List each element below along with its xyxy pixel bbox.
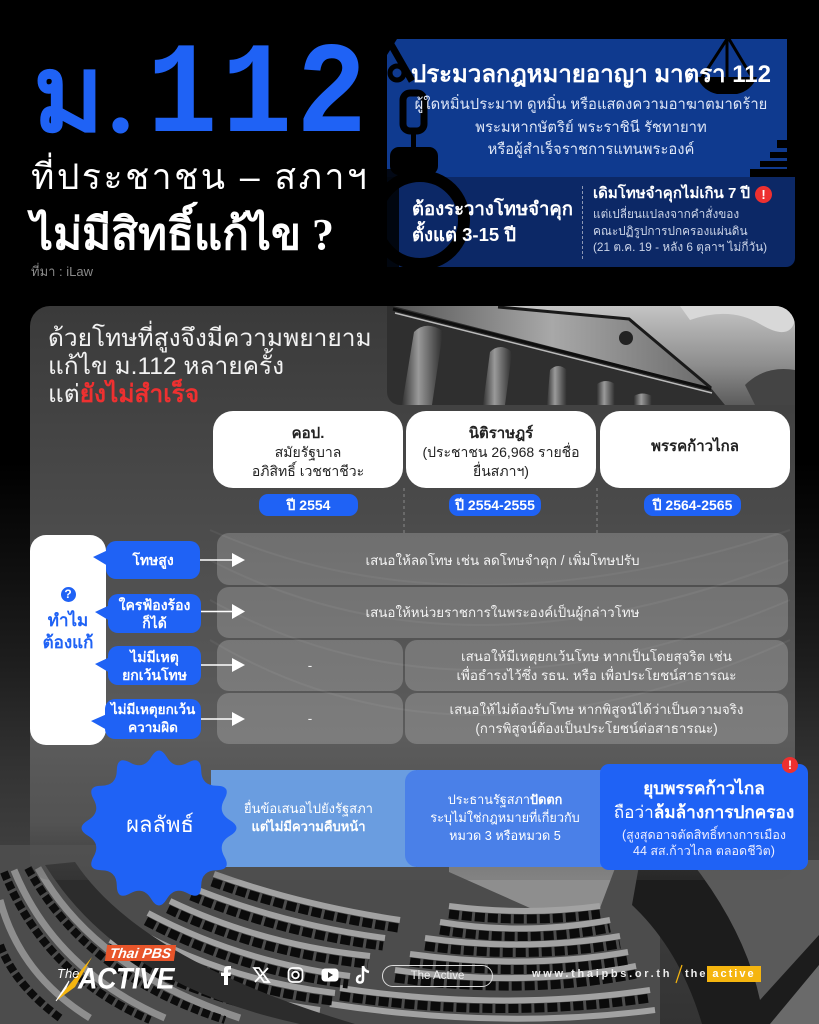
- Active: ACTIVE: [78, 962, 174, 995]
- main panel background: [30, 306, 795, 880]
- row 4 first column: -: [308, 711, 312, 726]
- row 4 first column: [217, 693, 403, 744]
- previous penalty detail: คณะปฏิรูปการปกครองแผ่นดิน: [593, 224, 748, 238]
- year pill 2: ปี 2554-2555: [455, 497, 535, 513]
- bubble tails and arrows: [91, 551, 245, 729]
- card: คอป.: คอป.: [292, 425, 324, 442]
- result headline: ถือว่าล้มล้างการปกครอง: [614, 802, 794, 822]
- url highlighted tag: [707, 966, 761, 982]
- bubble: ไม่มีเหตุยกเว้นความผิด: ความผิด: [128, 720, 178, 735]
- panel: law summary: [387, 39, 795, 267]
- bubble: ไม่มีเหตุยกเว้นโทษ: ยกเว้นโทษ: [122, 666, 187, 682]
- panel heading: แก้ไข ม.112 หลายครั้ง: [48, 353, 284, 380]
- title: ม.112: [33, 24, 371, 171]
- result headline: ยุบพรรคก้าวไกล: [643, 778, 765, 798]
- row 3 first column: [217, 640, 403, 691]
- year pill 2: [449, 494, 541, 516]
- year pill 1: [259, 494, 358, 516]
- icon: tiktok: [357, 966, 369, 983]
- row 3 second column: เพื่อธำรงไว้ซึ่ง รธน. หรือ เพื่อประโยชน์สาธารณะ: [456, 668, 736, 682]
- label box: why amend: [30, 535, 106, 745]
- label box: why amend: ต้องแก้: [43, 633, 93, 652]
- panel heading: แต่ยังไม่สำเร็จ: [48, 381, 199, 408]
- url highlighted tag: active: [712, 968, 756, 980]
- logo: The Active Thai PBS: [56, 945, 176, 1002]
- icon: facebook: [221, 966, 231, 985]
- background photo: parliament chamber: [0, 306, 819, 1024]
- icon: instagram: [288, 968, 302, 982]
- icon: question mark: ?: [64, 587, 72, 601]
- icon: red alert on result: [782, 757, 798, 773]
- label box: why amend: ทำไม: [48, 611, 88, 630]
- slash mark: [56, 957, 92, 1002]
- Thai PBS tag: Thai PBS: [109, 945, 172, 961]
- social handle pill: [382, 965, 493, 987]
- icon: red alert on result: !: [788, 758, 792, 772]
- bubble: ใครฟ้องร้องก็ได้: [108, 594, 201, 633]
- bubble: ไม่มีเหตุยกเว้นโทษ: ไม่มีเหตุ: [130, 648, 179, 664]
- result label: ผลลัพธ์: [126, 812, 194, 837]
- result band light: [211, 770, 416, 867]
- title: ม.112: ม: [33, 36, 104, 155]
- stage: [449, 855, 620, 908]
- card: คอป.: อภิสิทธิ์ เวชชาชีวะ: [252, 463, 364, 479]
- description: พระมหากษัตริย์ พระราชินี รัชทายาท: [475, 120, 707, 136]
- card: นิติราษฎร์: ยื่นสภาฯ): [473, 463, 529, 479]
- heading: ประมวลกฎหมายอาญา มาตรา 112: [411, 61, 771, 88]
- lower navy section: [387, 177, 795, 267]
- photo: parliament building: [387, 306, 795, 405]
- row 3 second column: เสนอให้มีเหตุยกเว้นโทษ หากเป็นโดยสุจริต เช่น: [461, 648, 732, 664]
- card: คอป.: สมัยรัฐบาล: [275, 444, 341, 460]
- row 3 second column: [405, 640, 788, 691]
- result: starburst: [82, 750, 236, 906]
- result band middle: ระบุไม่ใช่กฎหมายที่เกี่ยวกับ: [430, 811, 580, 825]
- icon: red alert: !: [761, 187, 766, 202]
- row 4 second column: เสนอให้ไม่ต้องรับโทษ หากพิสูจน์ได้ว่าเป็นความจริง: [450, 702, 743, 716]
- subtitle line 2: ไม่มีสิทธิ์แก้ไข ?: [31, 210, 334, 259]
- social handle pill: The Active: [411, 970, 464, 982]
- bubble: โทษสูง: [106, 541, 200, 579]
- result band middle: ประธานรัฐสภาปัดตก: [448, 793, 562, 807]
- icon: red alert: [755, 186, 772, 203]
- url slash: [676, 964, 682, 984]
- result band middle: [405, 770, 610, 867]
- result note: [622, 826, 786, 858]
- chamber wall: [632, 860, 819, 1024]
- description: หรือผู้สำเร็จราชการแทนพระองค์: [488, 142, 694, 158]
- panel heading: ด้วยโทษที่สูงจึงมีความพยายาม: [48, 325, 372, 352]
- result band light: แต่ไม่มีความคืบหน้า: [251, 819, 366, 834]
- previous penalty detail: [593, 206, 767, 254]
- title: ม.112: .: [108, 43, 133, 154]
- icon: X: [254, 968, 269, 982]
- previous penalty detail: แต่เปลี่ยนแปลงจากคำสั่งของ: [593, 207, 739, 221]
- divider: [582, 186, 583, 259]
- card: พรรคก้าวไกล: [600, 411, 790, 488]
- social icons: [221, 966, 370, 985]
- result band light: ยื่นข้อเสนอไปยังรัฐสภา: [244, 801, 373, 816]
- card: นิติราษฎร์: นิติราษฎร์: [469, 425, 533, 442]
- card: พรรคก้าวไกล: พรรคก้าวไกล: [651, 438, 739, 455]
- bubble: ไม่มีเหตุยกเว้นความผิด: [105, 699, 201, 739]
- source note: ที่มา : iLaw: [31, 264, 93, 279]
- card: คอป.: [213, 411, 403, 488]
- icon: chain, handcuff, scales and steps silhouettes: [387, 39, 787, 267]
- penalty: [412, 198, 573, 245]
- url path: the: [685, 968, 708, 980]
- bubble: ใครฟ้องร้องก็ได้: ใครฟ้องร้อง: [119, 596, 190, 612]
- result note: 44 สส.ก้าวไกล ตลอดชีวิต): [633, 844, 775, 858]
- result: party dissolved: [600, 764, 808, 870]
- result band middle: หมวด 3 หรือหมวด 5: [449, 829, 561, 843]
- previous penalty: เดิมโทษจำคุกไม่เกิน 7 ปี: [593, 185, 750, 202]
- row: โทษสูง: [217, 533, 788, 585]
- subtitle line 1: ที่ประชาชน – สภาฯ: [31, 157, 369, 197]
- icon: question mark: [60, 587, 76, 602]
- result headline: [614, 778, 794, 822]
- year pill 1: ปี 2554: [287, 497, 330, 513]
- panel heading: [48, 320, 372, 408]
- result note: (สูงสุดอาจตัดสิทธิ์ทางการเมือง: [622, 828, 786, 842]
- year pill 3: [644, 494, 741, 516]
- penalty: ต้องระวางโทษจำคุก: [412, 198, 573, 219]
- bubble: โทษสูง: โทษสูง: [132, 552, 174, 568]
- bubble: ใครฟ้องร้องก็ได้: ก็ได้: [142, 614, 167, 630]
- icon: youtube: [322, 968, 338, 982]
- year pill 3: ปี 2564-2565: [653, 497, 732, 513]
- title: ม.112: 112: [147, 24, 371, 171]
- row: ใครฟ้องร้องก็ได้: เสนอให้หน่วยราชการในพระองค์เป็นผู้กล่าวโทษ: [366, 605, 640, 620]
- card: นิติราษฎร์: [406, 411, 596, 488]
- row: โทษสูง: เสนอให้ลดโทษ เช่น ลดโทษจำคุก / เพิ่มโทษปรับ: [366, 553, 639, 568]
- card: นิติราษฎร์: (ประชาชน 26,968 รายชื่อ: [422, 444, 580, 460]
- row 3 first column: -: [308, 658, 312, 673]
- aisle: [45, 862, 355, 1024]
- row: ใครฟ้องร้องก็ได้: [217, 587, 788, 638]
- row 4 second column: [405, 693, 788, 744]
- seating base: [0, 845, 660, 1024]
- bubble: ไม่มีเหตุยกเว้นโทษ: [108, 646, 201, 685]
- bubble: ไม่มีเหตุยกเว้นความผิด: ไม่มีเหตุยกเว้น: [111, 702, 195, 717]
- website url: www.thaipbs.or.th: [532, 968, 672, 980]
- description: [415, 94, 767, 158]
- The: The: [57, 966, 79, 981]
- previous penalty detail: (21 ต.ค. 19 - หลัง 6 ตุลาฯ ไม่กี่วัน): [593, 240, 767, 254]
- upper blue section: [387, 39, 787, 177]
- row 4 second column: (การพิสูจน์ต้องเป็นประโยชน์ต่อสาธารณะ): [475, 720, 718, 736]
- penalty: ตั้งแต่ 3-15 ปี: [412, 224, 516, 245]
- description: ผู้ใดหมิ่นประมาท ดูหมิ่น หรือแสดงความอาฆาตมาดร้าย: [415, 97, 767, 113]
